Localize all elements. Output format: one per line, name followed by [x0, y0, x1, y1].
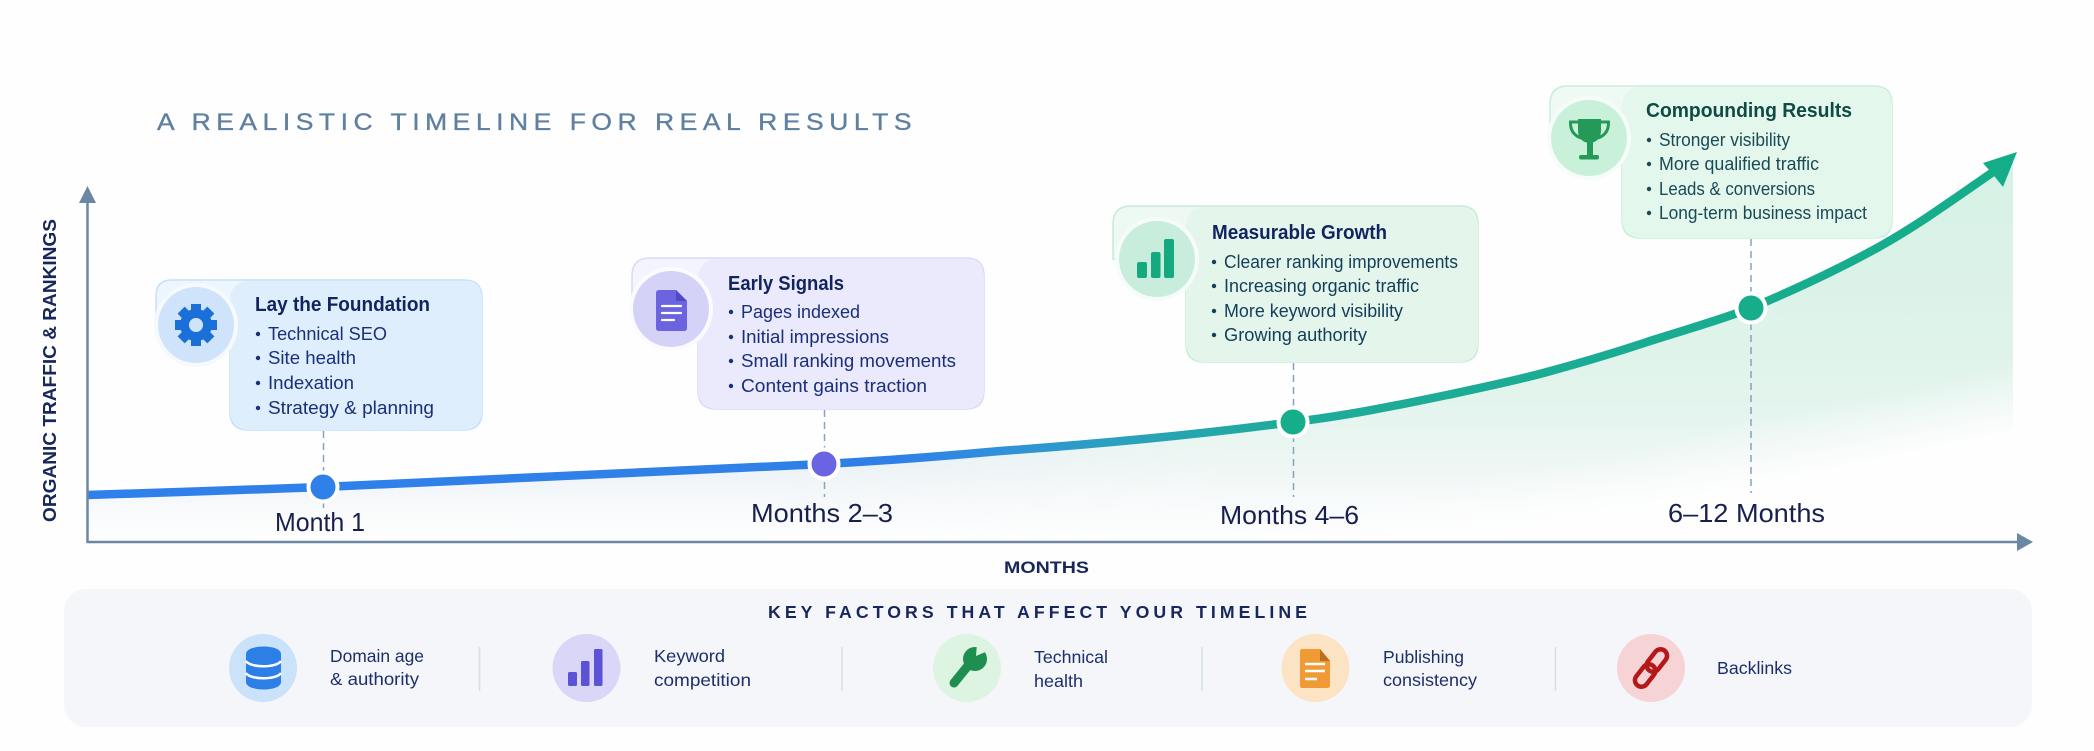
area under curve: [94, 162, 2013, 504]
bullet list: Content gains traction: [741, 375, 927, 396]
factor: publishing consistency: [1282, 634, 1477, 702]
bullet list: Technical SEO: [268, 323, 387, 344]
icon: bar chart: [1137, 239, 1174, 278]
bullet list: Initial impressions: [741, 326, 889, 347]
factor: domain age: [229, 634, 424, 702]
factor label: Publishing: [1383, 647, 1464, 667]
bullet list: Clearer ranking improvements: [1224, 251, 1458, 272]
card background: [1113, 206, 1478, 362]
card title: Measurable Growth: [1212, 222, 1387, 244]
factor label: Backlinks: [1717, 658, 1792, 678]
connector dashes: [324, 239, 1751, 508]
panel background: [64, 589, 2032, 727]
x axis: [87, 533, 2033, 551]
x axis label: MONTHS: [1004, 558, 1089, 577]
card title: Early Signals: [728, 273, 844, 295]
milestone dot: months 2-3: [810, 450, 838, 478]
arrowhead on growth line: [1983, 152, 2017, 187]
card title: Lay the Foundation: [255, 294, 430, 316]
icon: database: [229, 634, 297, 702]
card background: [629, 258, 984, 409]
icon: trophy: [1570, 119, 1609, 160]
bullet list: More keyword visibility: [1224, 300, 1404, 321]
panel: Compounding Results: [1547, 86, 1892, 238]
bullet list: Growing authority: [1224, 324, 1368, 345]
card background: [1547, 86, 1892, 238]
label: Months 4-6: Months 4–6: [1220, 500, 1359, 530]
icon: gear: [175, 304, 217, 346]
panel: Measurable Growth: [1113, 206, 1478, 362]
factor label: [654, 646, 751, 690]
milestone dot: months 4-6: [1278, 408, 1308, 436]
card background: [154, 280, 482, 430]
bullet list: Pages indexed: [741, 301, 860, 322]
factor label: health: [1034, 671, 1083, 691]
bullet list: Strategy & planning: [268, 397, 434, 418]
title: A REALISTIC TIMELINE FOR REAL RESULTS: [157, 109, 917, 136]
label: Month 1: Month 1: [275, 507, 365, 537]
dividers: [480, 647, 1556, 691]
factor label: consistency: [1383, 670, 1477, 690]
bullet list: Indexation: [268, 372, 354, 393]
label: Months 2-3: Months 2–3: [751, 498, 893, 528]
bullet list: Small ranking movements: [741, 350, 956, 371]
growth line: [87, 172, 1993, 495]
bullet list: [256, 323, 434, 418]
factor label: Keyword: [654, 646, 725, 666]
bullet list: Leads & conversions: [1659, 178, 1815, 199]
factor label: Domain age: [330, 646, 424, 666]
factor label: competition: [654, 670, 751, 690]
bullet list: [1647, 129, 1867, 223]
icon: wrench: [933, 634, 1001, 702]
factor label: [1034, 647, 1108, 691]
factor label: [330, 646, 424, 689]
panel heading: KEY FACTORS THAT AFFECT YOUR TIMELINE: [768, 602, 1311, 622]
panel: Early Signals: [629, 258, 984, 409]
bullet list: [1212, 251, 1458, 345]
icon: bars: [552, 634, 620, 702]
milestone dot: month 1: [308, 472, 338, 502]
card title: Compounding Results: [1646, 100, 1852, 122]
bullet list: Stronger visibility: [1659, 129, 1791, 150]
label: 6-12 Months: 6–12 Months: [1668, 498, 1825, 528]
factor label: Technical: [1034, 647, 1108, 667]
bullet list: [729, 301, 956, 396]
bullet list: More qualified traffic: [1659, 153, 1819, 174]
milestone dot: 6-12 months: [1736, 294, 1766, 322]
bullet list: Long-term business impact: [1659, 202, 1867, 223]
area chart: organic growth curve: [87, 152, 2017, 541]
panel: Lay the Foundation: [154, 280, 482, 430]
bullet list: Site health: [268, 347, 356, 368]
factor label: & authority: [330, 669, 419, 689]
icon: chain link: [1617, 634, 1685, 702]
panel: key factors: [64, 589, 2032, 727]
y axis: [79, 186, 96, 543]
factor: backlinks: [1617, 634, 1792, 702]
factor label: [1383, 647, 1477, 690]
icon: document: [656, 290, 687, 331]
y axis label: ORGANIC TRAFFIC & RANKINGS: [40, 219, 60, 522]
factor: keyword competition: [552, 634, 751, 702]
factor: technical health: [933, 634, 1108, 702]
icon: orange document: [1282, 634, 1350, 702]
bullet list: Increasing organic traffic: [1224, 275, 1419, 296]
